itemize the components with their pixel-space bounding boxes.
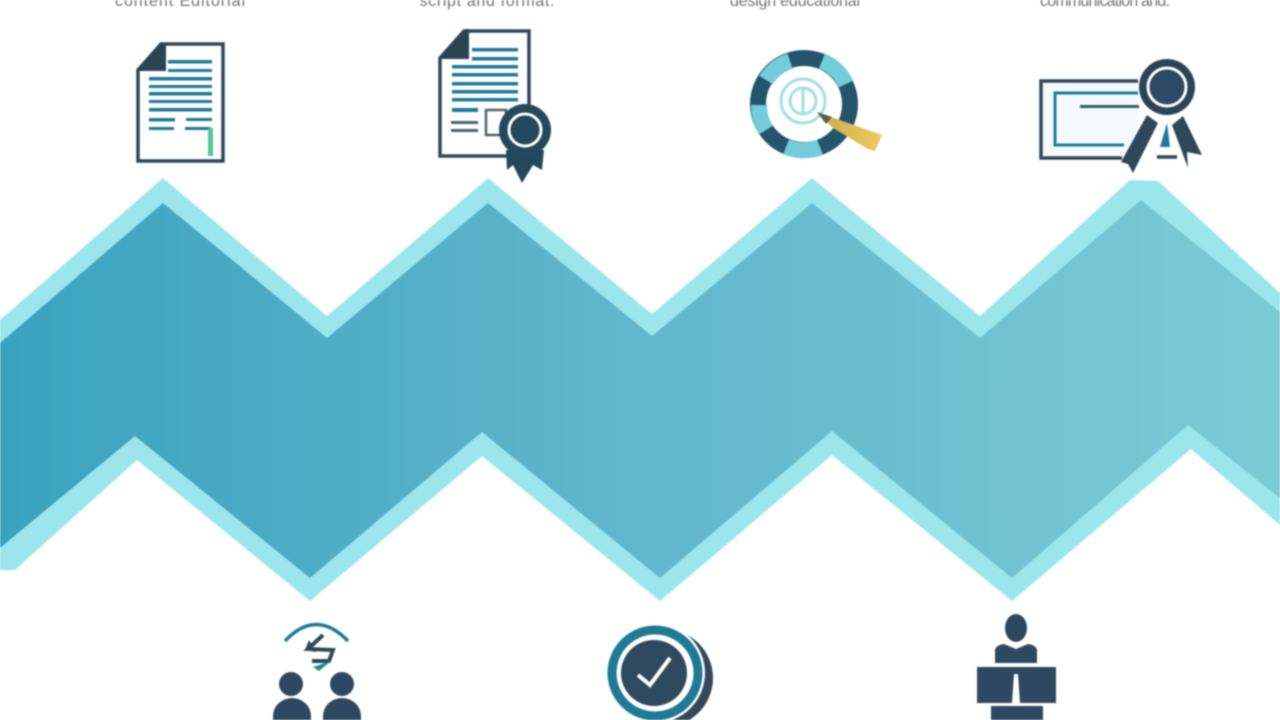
zigzag band with light borders (0, 178, 1280, 601)
icon: certificate with ribbon (1041, 59, 1202, 173)
icon: document with seal (439, 29, 551, 183)
icon: document (137, 43, 223, 161)
icon: presenter at podium (977, 614, 1056, 720)
icon: two people with exchange (273, 624, 361, 720)
icon: dial with pencil (758, 58, 882, 151)
icon: check badge (605, 623, 713, 720)
seal ribbon (506, 150, 544, 183)
